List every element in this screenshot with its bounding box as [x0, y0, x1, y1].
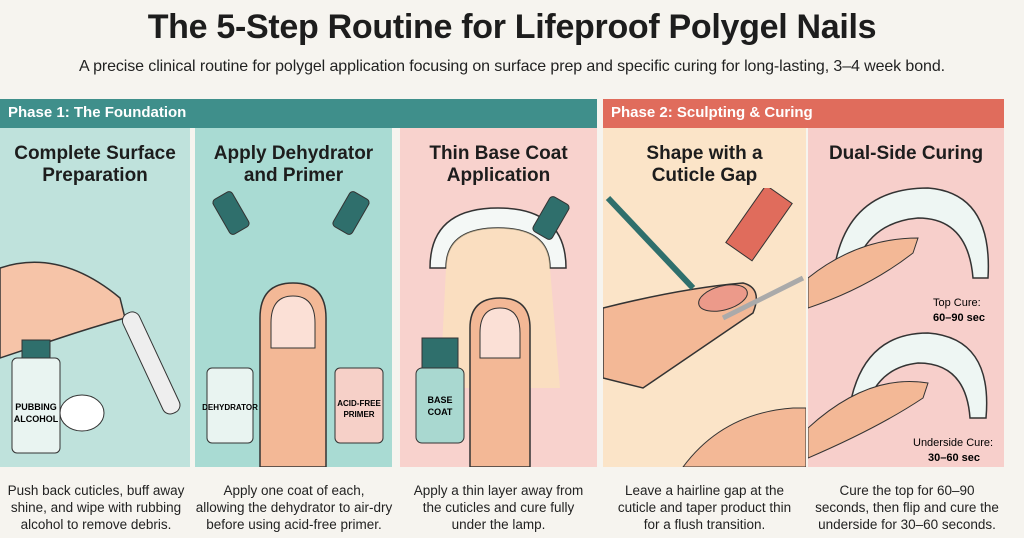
panel: step 3: [400, 128, 597, 467]
heading: Shape with a: [646, 143, 763, 164]
subtitle: A precise clinical routine for polygel application focusing on surface prep and specific curing for long-lasting, 3–4 week bond.: [79, 58, 945, 75]
illustration: two lamps with hands: [808, 187, 993, 464]
illustration: hand, file, alcohol: ALCOHOL: [14, 414, 59, 424]
illustration: lamp, finger, base coat: BASE: [427, 395, 453, 405]
caption 2: Apply one coat of each,: [223, 483, 365, 498]
caption 5: [815, 483, 999, 532]
illustration: lamp, finger, base coat: [416, 196, 570, 467]
heading: [646, 143, 763, 186]
caption 3: under the lamp.: [452, 517, 545, 532]
caption 5: Cure the top for 60–90: [839, 483, 975, 498]
illustration: two lamps with hands: 30–60 sec: [928, 452, 980, 464]
heading: and Primer: [244, 165, 343, 186]
illustration: finger, tube, brush: [603, 188, 806, 467]
illustration: two lamps with hands: Underside Cure:: [913, 437, 993, 449]
caption 1: Push back cuticles, buff away: [8, 483, 184, 498]
caption 3: [414, 483, 583, 532]
caption 4: [618, 483, 791, 532]
heading: Complete Surface: [14, 143, 176, 164]
phase 1 header: [0, 99, 597, 128]
panel: step 2: [195, 128, 392, 467]
illustration: lamp, finger, base coat: COAT: [428, 407, 453, 417]
heading: Thin Base Coat: [429, 143, 568, 164]
title: The 5-Step Routine for Lifeproof Polygel Nails: [148, 8, 876, 46]
caption 1: alcohol to remove debris.: [21, 517, 171, 532]
illustration: finger and bottles: [202, 191, 384, 467]
caption 4: Leave a hairline gap at the: [625, 483, 784, 498]
illustration: finger and bottles: PRIMER: [343, 410, 375, 419]
caption 4: cuticle and taper product thin: [618, 500, 791, 515]
caption 3: Apply a thin layer away from: [414, 483, 583, 498]
heading: [214, 143, 373, 186]
heading: Dual-Side Curing: [829, 143, 983, 164]
caption 3: the cuticles and cure fully: [423, 500, 574, 515]
panel: step 5: [808, 128, 1004, 467]
heading: [429, 143, 568, 186]
heading: Apply Dehydrator: [214, 143, 373, 164]
caption 1: [8, 483, 184, 532]
caption 5: seconds, then flip and cure the: [815, 500, 999, 515]
phase 1 header: Phase 1: The Foundation: [8, 104, 186, 121]
caption 5: underside for 30–60 seconds.: [818, 517, 996, 532]
heading: Application: [447, 165, 550, 186]
caption 2: allowing the dehydrator to air-dry: [196, 500, 392, 515]
illustration: finger and bottles: ACID-FREE: [337, 399, 381, 408]
heading: [14, 143, 176, 186]
illustration: hand, file, alcohol: PUBBING: [15, 402, 57, 412]
panel: step 4: [603, 128, 806, 467]
phase 2 header: [603, 99, 1004, 128]
illustration: two lamps with hands: 60–90 sec: [933, 312, 985, 324]
illustration: finger and bottles: DEHYDRATOR: [202, 403, 258, 412]
caption 1: shine, and wipe with rubbing: [11, 500, 181, 515]
panel: step 1: [0, 128, 190, 467]
heading: Preparation: [42, 165, 148, 186]
caption 4: for a flush transition.: [644, 517, 765, 532]
caption 2: [196, 483, 392, 532]
illustration: hand, file, alcohol: [0, 262, 180, 454]
heading: Cuticle Gap: [652, 165, 757, 186]
caption 2: before using acid-free primer.: [206, 517, 382, 532]
illustration: two lamps with hands: Top Cure:: [933, 297, 981, 309]
phase 2 header: Phase 2: Sculpting & Curing: [611, 104, 813, 121]
